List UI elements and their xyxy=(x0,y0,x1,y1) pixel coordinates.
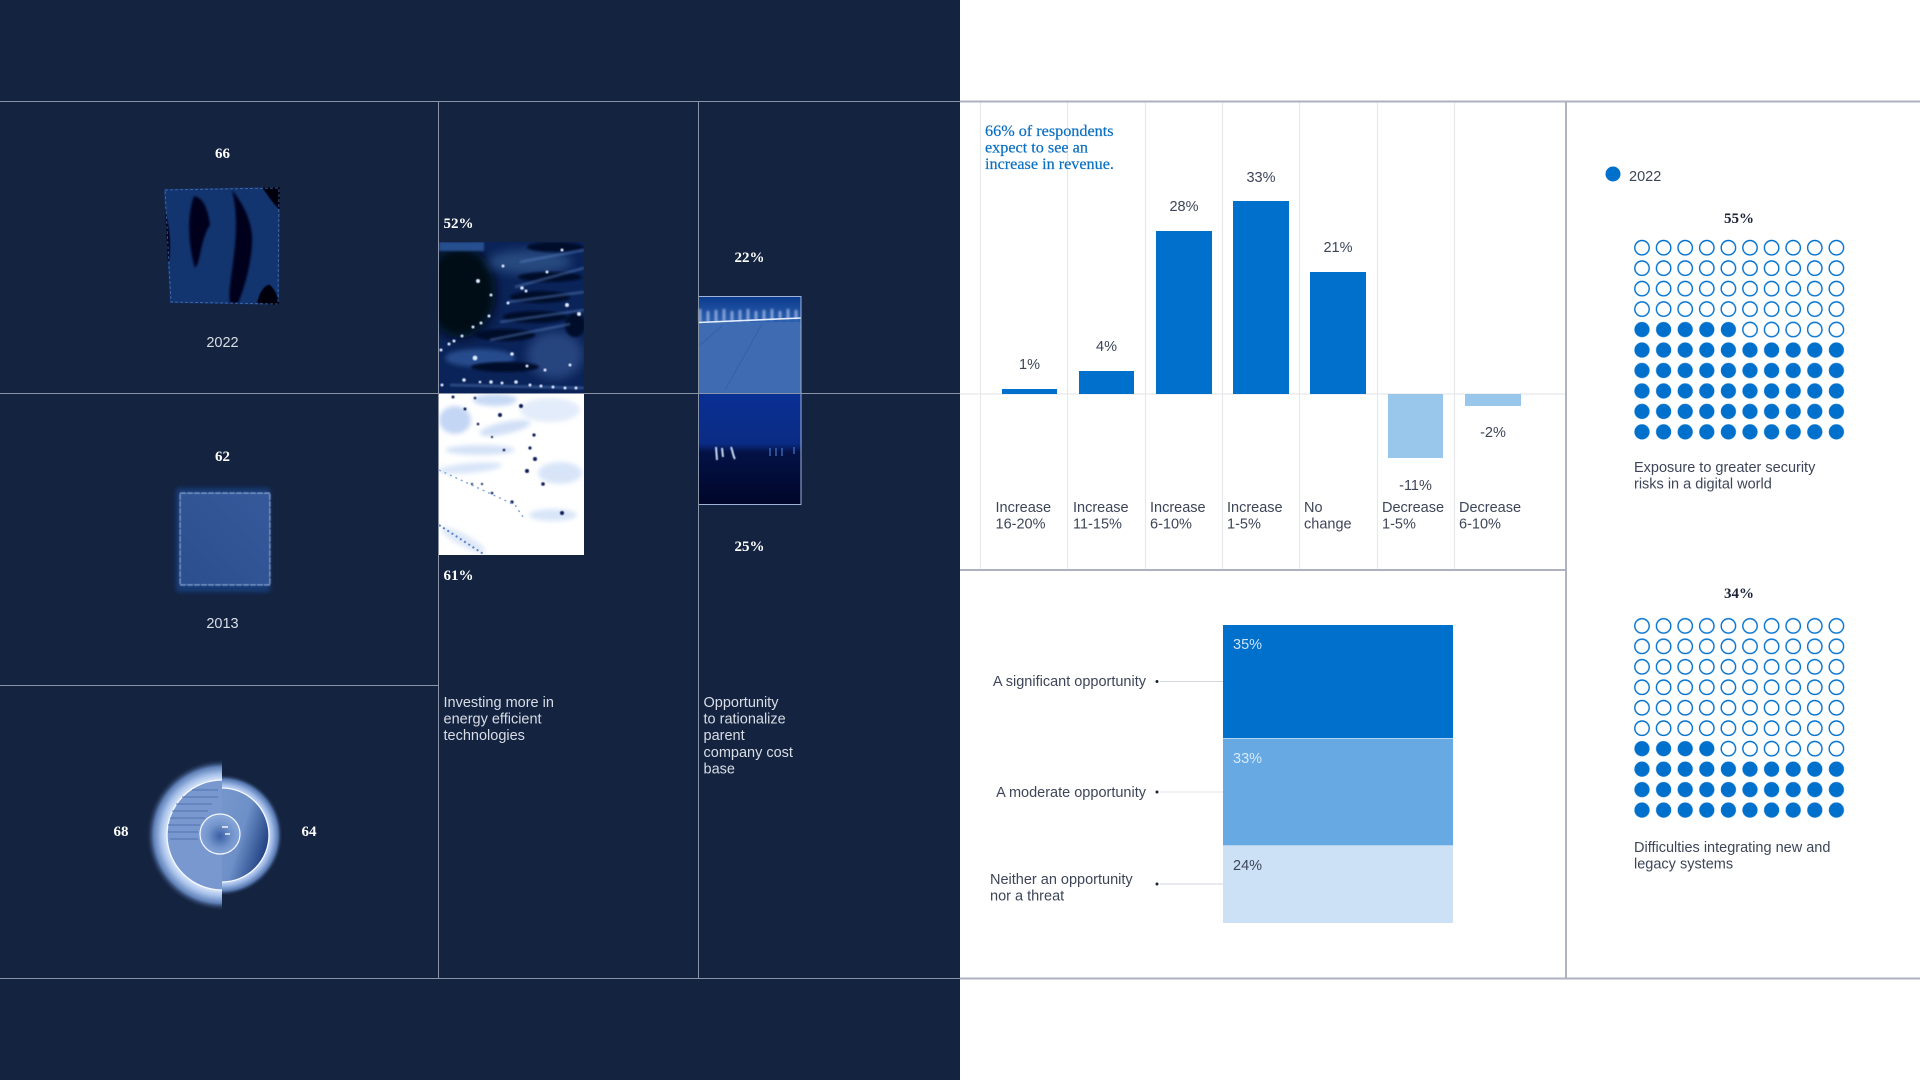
heading: 34 percent: 34% xyxy=(1724,586,1754,602)
callout: revenue expectation: 66% of respondents xyxy=(985,122,1114,140)
bar: no change xyxy=(1304,240,1366,533)
bar chart: revenue change xyxy=(996,170,1521,533)
label with leader: moderate opportunity: A moderate opportunity xyxy=(996,785,1147,801)
label with leader: significant opportunity xyxy=(993,674,1223,690)
text block: security risks: Exposure to greater security xyxy=(1634,460,1816,476)
label: 61 percent: 61% xyxy=(444,568,474,584)
bar: decrease 1-5: -11% xyxy=(1399,478,1432,494)
bar: decrease 6-10: 6-10% xyxy=(1459,517,1501,533)
grid lines: light panel xyxy=(960,101,1920,978)
text block: energy efficient technologies: Investing more in xyxy=(444,695,554,711)
label: 62 score: 62 xyxy=(215,449,230,465)
text block: rationalize cost base: Opportunity xyxy=(704,695,779,711)
segment: significant xyxy=(1223,625,1453,738)
image frame: blue texture outline xyxy=(698,296,801,504)
label: 66 score: 66 xyxy=(215,146,230,162)
bar: increase 6-10 xyxy=(1150,199,1212,533)
heading: 55 percent: 55% xyxy=(1724,211,1754,227)
bar: increase 16-20 xyxy=(996,357,1057,533)
bar: no change: 21% xyxy=(1323,240,1353,256)
bar: increase 11-15 xyxy=(1073,339,1134,533)
panel: white right background xyxy=(960,0,1920,1080)
callout: revenue expectation: expect to see an xyxy=(985,138,1088,156)
segment: neither xyxy=(1223,846,1453,923)
bar: increase 6-10: 6-10% xyxy=(1150,517,1192,533)
legend: 2022: 2022 xyxy=(1629,169,1661,185)
grid lines: dark panel xyxy=(0,101,960,978)
label with leader: significant opportunity: A significant opportunity xyxy=(993,674,1147,690)
label: 64 score: 64 xyxy=(302,824,317,840)
segment: neither: 24% xyxy=(1233,858,1262,874)
bar: no change: change xyxy=(1304,517,1352,533)
image: 25% dark blue texture xyxy=(698,394,801,504)
label: 68 score: 68 xyxy=(114,824,128,840)
text block: rationalize cost base: parent xyxy=(704,728,745,744)
label with leader: neither: nor a threat xyxy=(990,889,1064,905)
label: 25 percent: 25% xyxy=(734,539,764,555)
bar: no change: No xyxy=(1304,500,1323,516)
bar: increase 6-10: Increase xyxy=(1150,500,1206,516)
bar: increase 11-15: 4% xyxy=(1096,339,1117,355)
callout: revenue expectation: increase in revenue. xyxy=(985,155,1114,173)
bar: increase 11-15: 11-15% xyxy=(1073,517,1122,533)
image: 2022 warped square xyxy=(160,185,284,307)
bar: increase 1-5 xyxy=(1227,170,1289,533)
segment: moderate: 33% xyxy=(1233,751,1262,767)
image: 61% light texture xyxy=(438,394,584,557)
bar: decrease 6-10 xyxy=(1459,394,1521,533)
text block: energy efficient technologies: energy efficient xyxy=(444,712,542,728)
image: 52% dark texture xyxy=(424,242,585,393)
bar: increase 16-20: 16-20% xyxy=(996,517,1046,533)
dot matrix: 34 percent xyxy=(1631,616,1847,820)
legend: 2022 xyxy=(1606,166,1661,185)
image: 2013 stitched square xyxy=(176,488,270,592)
bar: decrease 1-5: 1-5% xyxy=(1382,517,1416,533)
label with leader: neither xyxy=(990,872,1223,905)
bar: decrease 1-5: Decrease xyxy=(1382,500,1444,516)
text block: rationalize cost base: base xyxy=(704,761,735,777)
image: 22% blue texture xyxy=(698,296,801,394)
label with leader: neither: Neither an opportunity xyxy=(990,872,1133,888)
text block: energy efficient technologies: technologies xyxy=(444,728,525,744)
bar: decrease 6-10: -2% xyxy=(1480,425,1506,441)
bar: decrease 1-5 xyxy=(1382,394,1444,533)
text block: rationalize cost base: to rationalize xyxy=(704,712,786,728)
bar: increase 1-5: Increase xyxy=(1227,500,1283,516)
stacked bar: opportunity xyxy=(1223,625,1453,923)
text block: legacy systems: legacy systems xyxy=(1634,857,1733,873)
segment: significant: 35% xyxy=(1233,637,1262,653)
bar: increase 11-15: Increase xyxy=(1073,500,1129,516)
label: 22 percent: 22% xyxy=(734,250,764,266)
label with leader: moderate opportunity xyxy=(996,785,1223,801)
text block: rationalize cost base: company cost xyxy=(704,745,793,761)
label: 2013 year: 2013 xyxy=(206,616,239,632)
segment: moderate xyxy=(1223,738,1453,846)
text block: security risks: risks in a digital world xyxy=(1634,477,1772,493)
dot matrix: 55 percent xyxy=(1631,238,1847,442)
label: 52 percent: 52% xyxy=(444,216,474,232)
bar: increase 6-10: 28% xyxy=(1169,199,1199,215)
bar: increase 16-20: Increase xyxy=(996,500,1051,516)
image: split circle xyxy=(148,761,282,909)
bar: increase 1-5: 33% xyxy=(1246,170,1276,186)
bar: increase 16-20: 1% xyxy=(1019,357,1040,373)
panel: dark left background xyxy=(0,0,960,1080)
text block: legacy systems: Difficulties integrating new and xyxy=(1634,840,1830,856)
bar: decrease 6-10: Decrease xyxy=(1459,500,1521,516)
label: 2022 year: 2022 xyxy=(206,335,239,351)
bar: increase 1-5: 1-5% xyxy=(1227,517,1261,533)
